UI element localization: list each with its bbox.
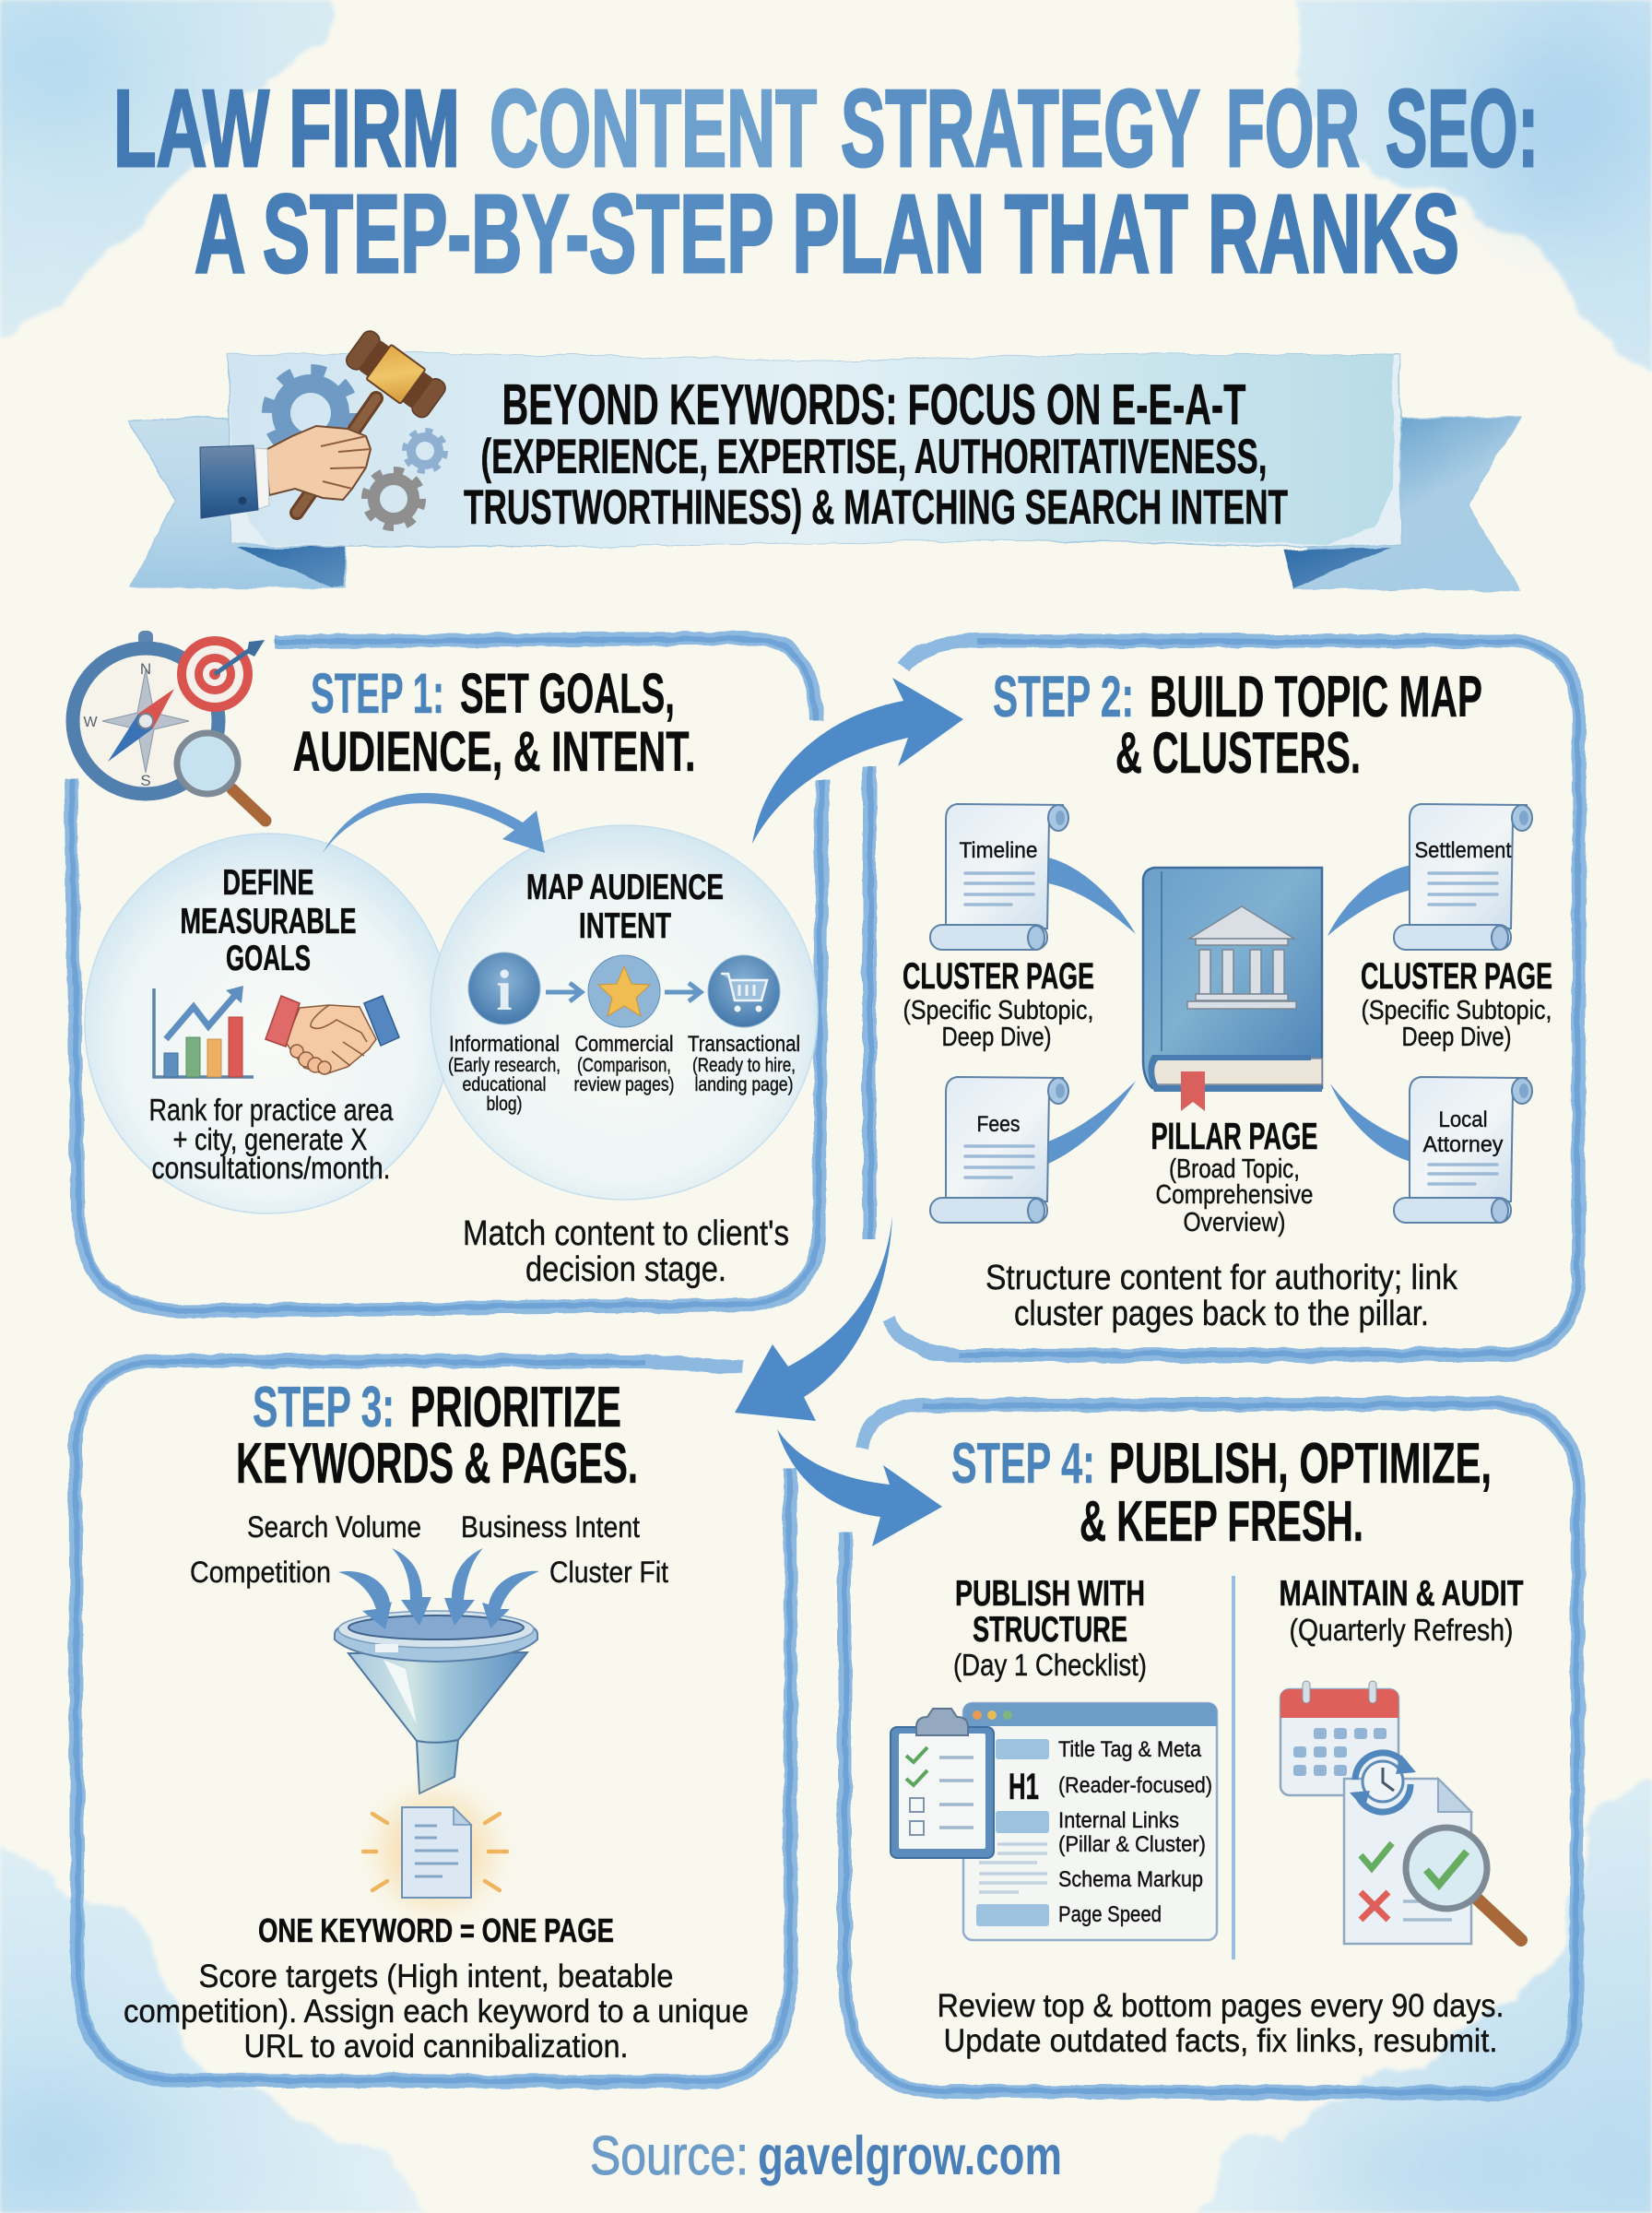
icon: bar chart bbox=[154, 986, 254, 1077]
panel: step 4 bbox=[844, 1403, 1578, 2093]
bubble: define goals: MEASURABLE bbox=[181, 902, 356, 941]
bubble: define goals: consultations/month. bbox=[151, 1151, 391, 1185]
arrow: step 2 to step 3 bbox=[735, 1215, 892, 1421]
connectors: cluster to pillar bbox=[1048, 858, 1411, 1164]
source footer bbox=[590, 2125, 1062, 2186]
bubble: define goals bbox=[85, 834, 452, 1213]
panel: step 1 bbox=[71, 631, 822, 1311]
column divider bbox=[1232, 1576, 1235, 1959]
step 3 heading bbox=[236, 1376, 638, 1496]
column heading: publish: STRUCTURE bbox=[973, 1610, 1127, 1650]
icon: browser page: H1 bbox=[1009, 1767, 1039, 1807]
step 2 note bbox=[985, 1259, 1458, 1333]
step 4 note: Update outdated facts, fix links, resubmit. bbox=[944, 2023, 1497, 2059]
step 1 note bbox=[463, 1214, 789, 1289]
icon: browser page: (Pillar & Cluster) bbox=[1058, 1832, 1206, 1857]
title: STRATEGY bbox=[841, 67, 1200, 190]
step 3 note: Score targets (High intent, beatable bbox=[199, 1959, 673, 1994]
step 3 heading: STEP 3: bbox=[253, 1376, 395, 1439]
step 4 note bbox=[937, 1988, 1504, 2059]
cluster scroll: fees bbox=[930, 1077, 1068, 1223]
icon: commercial star bbox=[588, 955, 660, 1027]
source footer: Source: bbox=[590, 2125, 749, 2186]
step 2 heading: & CLUSTERS. bbox=[1115, 721, 1361, 786]
step 3 note: competition). Assign each keyword to a unique bbox=[124, 1994, 749, 2030]
title: SEO: bbox=[1386, 67, 1539, 190]
cluster labels: CLUSTER PAGE bbox=[1361, 956, 1552, 997]
icon: audit document bbox=[1344, 1779, 1471, 1944]
icon: magnifier bbox=[177, 733, 266, 821]
cluster scroll: fees: Fees bbox=[977, 1112, 1020, 1137]
icon: gears, hand and gavel bbox=[200, 327, 449, 527]
column heading: publish bbox=[953, 1574, 1147, 1682]
cluster scroll: local attorney: Local bbox=[1438, 1107, 1488, 1132]
step 2 heading: STEP 2: bbox=[993, 665, 1134, 729]
title: LAW FIRM bbox=[113, 67, 460, 190]
icon: glowing page bbox=[363, 1798, 507, 1905]
icon: clipboard bbox=[891, 1709, 994, 1858]
panel: step 2 bbox=[869, 641, 1579, 1355]
cluster scroll: settlement: Settlement bbox=[1414, 838, 1512, 863]
source footer: gavelgrow.com bbox=[758, 2125, 1062, 2186]
arrow: goals to intent bbox=[323, 793, 545, 853]
banner ribbon bbox=[129, 353, 1521, 590]
panel: step 3 bbox=[76, 1361, 791, 2082]
column heading: maintain bbox=[1280, 1574, 1524, 1647]
icon: handshake bbox=[266, 996, 399, 1074]
step 1 heading: SET GOALS, bbox=[460, 662, 675, 725]
step 1 heading: STEP 1: bbox=[311, 662, 444, 725]
column heading: publish: PUBLISH WITH bbox=[955, 1574, 1145, 1614]
cluster labels: (Specific Subtopic, bbox=[903, 996, 1093, 1025]
cluster scroll: local attorney bbox=[1394, 1077, 1532, 1223]
bubble: define goals: Rank for practice area bbox=[149, 1093, 394, 1127]
intent labels: (Early research, bbox=[448, 1055, 560, 1076]
intent labels: Transactional bbox=[688, 1032, 800, 1057]
column heading: maintain: MAINTAIN & AUDIT bbox=[1280, 1574, 1524, 1614]
intent labels: (Comparison, bbox=[577, 1055, 671, 1076]
step 4 note: Review top & bottom pages every 90 days. bbox=[937, 1988, 1504, 2024]
title bbox=[113, 67, 1539, 296]
pillar label: (Broad Topic, bbox=[1169, 1154, 1300, 1184]
bubble: map audience intent: MAP AUDIENCE bbox=[526, 868, 724, 907]
step 4 border bbox=[844, 1403, 1578, 2093]
title: CONTENT bbox=[490, 67, 817, 190]
icon: browser page: (Reader-focused) bbox=[1058, 1773, 1212, 1798]
icon: compass bbox=[73, 631, 218, 794]
cluster labels: Deep Dive) bbox=[942, 1023, 1051, 1052]
intent labels bbox=[448, 1032, 800, 1115]
step 3 border bbox=[76, 1361, 791, 2082]
cluster labels: CLUSTER PAGE bbox=[903, 956, 1094, 997]
icon: compass: N bbox=[140, 660, 151, 678]
banner heading: BEYOND KEYWORDS: FOCUS ON E-E-A-T bbox=[502, 373, 1246, 437]
step 2 note: cluster pages back to the pillar. bbox=[1014, 1295, 1429, 1333]
bubble: define goals: GOALS bbox=[226, 939, 311, 978]
arrow: step 3 to step 4 bbox=[777, 1429, 942, 1546]
cluster scroll: timeline bbox=[930, 804, 1068, 950]
step 1 note: Match content to client's bbox=[463, 1214, 789, 1253]
intent labels: Informational bbox=[449, 1032, 560, 1057]
bubble: map audience intent: INTENT bbox=[579, 906, 671, 946]
icon: browser page: Internal Links bbox=[1058, 1808, 1179, 1833]
step 3 heading: KEYWORDS & PAGES. bbox=[236, 1432, 638, 1496]
bubble: define goals: DEFINE bbox=[223, 863, 313, 903]
icon: browser page: Title Tag & Meta bbox=[1058, 1737, 1202, 1762]
icon: refresh clock bbox=[1350, 1753, 1416, 1812]
pillar label: PILLAR PAGE bbox=[1150, 1115, 1318, 1157]
banner heading: (EXPERIENCE, EXPERTISE, AUTHORITATIVENESS, bbox=[481, 430, 1267, 484]
intent labels: educational bbox=[463, 1074, 546, 1095]
icon: browser page: Page Speed bbox=[1058, 1902, 1162, 1927]
step 3 heading: PRIORITIZE bbox=[410, 1376, 621, 1439]
funnel criteria labels: Business Intent bbox=[461, 1510, 640, 1544]
step 3 note bbox=[124, 1959, 749, 2065]
icon: compass: S bbox=[140, 772, 151, 789]
one keyword text: ONE KEYWORD = ONE PAGE bbox=[258, 1911, 614, 1949]
intent labels: (Ready to hire, bbox=[692, 1055, 796, 1076]
funnel criteria labels: Competition bbox=[190, 1556, 331, 1589]
bubble: define goals: + city, generate X bbox=[173, 1122, 367, 1156]
step 2 note: Structure content for authority; link bbox=[985, 1259, 1458, 1297]
column heading: maintain: (Quarterly Refresh) bbox=[1289, 1613, 1514, 1647]
step 2 heading bbox=[993, 665, 1482, 786]
intent labels: review pages) bbox=[573, 1074, 675, 1095]
icon: funnel bbox=[335, 1611, 537, 1793]
arrow: to commercial bbox=[546, 983, 582, 1001]
step 1 heading: AUDIENCE, & INTENT. bbox=[293, 720, 695, 783]
intent labels: blog) bbox=[487, 1094, 522, 1115]
step 2 border bbox=[869, 641, 1579, 1355]
arrows: criteria into funnel bbox=[338, 1548, 539, 1629]
cluster scroll: settlement bbox=[1394, 804, 1532, 950]
bubble: map audience intent bbox=[431, 825, 818, 1200]
funnel criteria labels: Search Volume bbox=[247, 1510, 421, 1544]
banner heading bbox=[464, 373, 1288, 535]
funnel criteria labels: Cluster Fit bbox=[549, 1556, 668, 1589]
step 4 heading: STEP 4: bbox=[951, 1432, 1095, 1496]
arrow: to transactional bbox=[665, 983, 701, 1001]
icon: compass: W bbox=[83, 715, 98, 730]
icon: transactional cart bbox=[708, 955, 780, 1027]
cluster labels bbox=[903, 956, 1552, 1052]
intent labels: Commercial bbox=[575, 1032, 673, 1057]
icon: browser page bbox=[963, 1703, 1217, 1940]
icon: target bbox=[177, 636, 265, 712]
step 3 note: URL to avoid cannibalization. bbox=[243, 2029, 629, 2065]
step 4 heading: & KEEP FRESH. bbox=[1080, 1490, 1363, 1554]
icon: informational: i bbox=[496, 960, 513, 1023]
step 1 heading bbox=[293, 662, 695, 783]
arrow: step 1 to step 2 bbox=[752, 678, 963, 844]
icon: browser page: Schema Markup bbox=[1058, 1867, 1203, 1892]
icon: informational bbox=[468, 953, 540, 1024]
step 2 heading: BUILD TOPIC MAP bbox=[1150, 665, 1482, 729]
step 1 note: decision stage. bbox=[525, 1250, 726, 1289]
icon: calendar bbox=[1280, 1681, 1398, 1795]
cluster labels: Deep Dive) bbox=[1401, 1023, 1512, 1052]
funnel criteria labels bbox=[190, 1510, 668, 1589]
step 4 heading bbox=[951, 1432, 1492, 1554]
intent labels: landing page) bbox=[695, 1074, 793, 1095]
step 1 border bbox=[71, 638, 822, 1311]
cluster scroll: local attorney: Attorney bbox=[1423, 1132, 1503, 1157]
icon: pillar book bbox=[1143, 868, 1322, 1111]
title: FOR bbox=[1226, 67, 1360, 190]
pillar label bbox=[1150, 1115, 1318, 1237]
icon: audit magnifier bbox=[1406, 1828, 1521, 1940]
cluster labels: (Specific Subtopic, bbox=[1361, 996, 1552, 1025]
column heading: publish: (Day 1 Checklist) bbox=[953, 1648, 1147, 1682]
pillar label: Overview) bbox=[1184, 1208, 1285, 1237]
cluster scroll: timeline: Timeline bbox=[959, 838, 1038, 863]
pillar label: Comprehensive bbox=[1156, 1180, 1313, 1210]
